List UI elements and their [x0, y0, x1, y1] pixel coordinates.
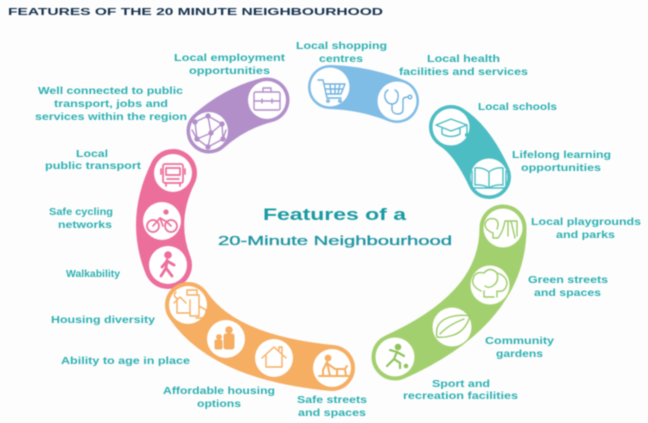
label: local public transport [45, 148, 142, 172]
label: walkability: Walkability [66, 268, 120, 280]
label: local employment [174, 52, 286, 77]
label: safe cycling: Safe cycling [49, 206, 113, 218]
label: well connected [35, 85, 187, 123]
label: safe streets [297, 394, 367, 419]
label: safe cycling [49, 206, 113, 231]
label: local employment: opportunities [189, 65, 270, 77]
icon: runner with ball [387, 345, 407, 368]
label: community gardens [485, 335, 554, 360]
label: local schools: Local schools [478, 101, 557, 113]
panel: transport and walking (pink) [143, 154, 192, 284]
icon: mixed housing [174, 290, 206, 318]
label: sport and recreation: Sport and [432, 378, 490, 390]
label: community gardens: Community [485, 335, 554, 347]
label: well connected: services within the region [35, 111, 187, 123]
icon: pedestrian [161, 253, 174, 276]
title: FEATURES OF THE 20 MINUTE NEIGHBOURHOOD [8, 6, 384, 18]
label: local employment: Local employment [174, 52, 286, 64]
label: green streets: and spaces [534, 287, 601, 299]
icon: network globe [192, 114, 226, 149]
label: lifelong learning: opportunities [521, 162, 601, 174]
label: safe streets: and spaces [298, 407, 366, 419]
icon: trees [473, 270, 507, 297]
label: sport and recreation [403, 378, 518, 402]
label: lifelong learning [512, 149, 611, 174]
label: local shopping: Local shopping [296, 40, 387, 52]
centre heading [218, 205, 452, 248]
icon: cyclist [147, 210, 177, 232]
label: community gardens: gardens [496, 348, 543, 360]
panel: parks and recreation (green) [376, 208, 522, 376]
icon: graduation cap [436, 119, 468, 136]
label: local health: facilities and services [399, 66, 528, 78]
label: local public transport: public transport [45, 160, 142, 172]
label: affordable housing [163, 385, 275, 410]
label: safe streets: Safe streets [297, 394, 367, 406]
label: green streets [528, 274, 608, 299]
label: local health [399, 53, 528, 78]
label: local shopping [296, 40, 387, 65]
centre heading: 20-Minute Neighbourhood [218, 233, 452, 248]
icon: open book [472, 168, 506, 188]
panel: schools and learning (teal) [432, 108, 508, 196]
label: local health: Local health [427, 53, 500, 65]
label: local playgrounds [531, 216, 641, 241]
label: ability to age in place: Ability to age in place [61, 355, 190, 367]
label: affordable housing: Affordable housing [163, 385, 275, 397]
panel: employment and connectivity (purple) [190, 81, 286, 150]
label: sport and recreation: recreation facilities [403, 390, 518, 402]
icon: briefcase [254, 88, 280, 110]
label: safe cycling: networks [58, 219, 112, 231]
icon: bus [161, 164, 185, 186]
panel: shopping and health (blue) [310, 68, 416, 120]
label: affordable housing: options [197, 398, 241, 410]
icon: house [262, 347, 286, 367]
centre heading: Features of a [263, 205, 407, 224]
icon: shopping cart [318, 80, 345, 102]
icon: stethoscope [385, 90, 412, 114]
label: local playgrounds: and parks [556, 229, 615, 241]
icon: leaf [437, 315, 470, 337]
label: well connected: transport, jobs and [54, 98, 168, 110]
label: lifelong learning: Lifelong learning [512, 149, 611, 161]
label: local shopping: centres [319, 53, 363, 65]
panel: housing and safety (orange) [169, 286, 351, 387]
icon: playground [485, 219, 517, 238]
label: well connected: Well connected to public [38, 85, 183, 97]
label: housing diversity: Housing diversity [51, 314, 155, 326]
icon: two generations [215, 327, 234, 349]
label: local playgrounds: Local playgrounds [531, 216, 641, 228]
label: local public transport: Local [76, 148, 108, 160]
label: green streets: Green streets [528, 274, 608, 286]
icon: person walking dog [319, 356, 349, 376]
